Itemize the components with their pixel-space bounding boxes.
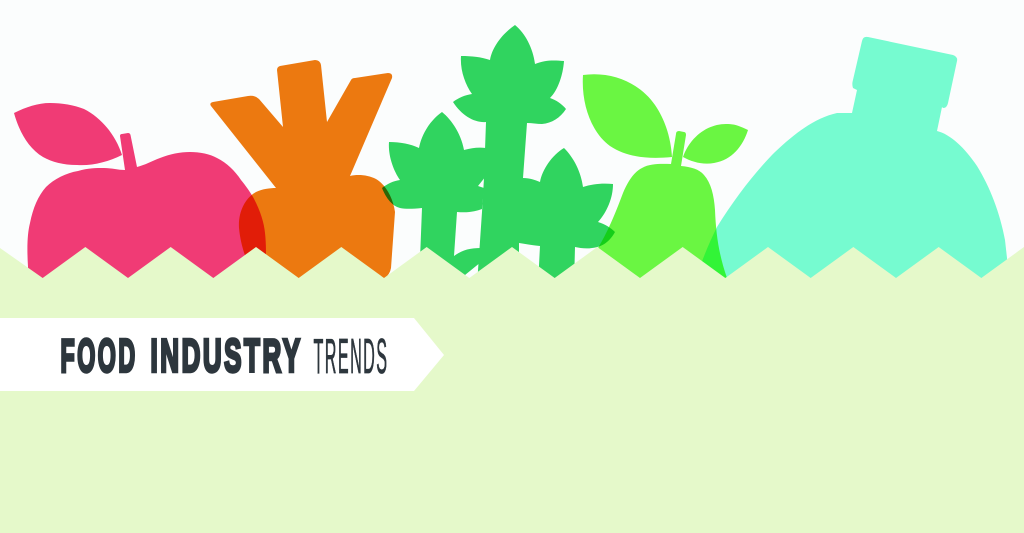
title: trends: TRENDS <box>314 329 388 384</box>
title: food industry: FOOD <box>60 330 138 382</box>
celery left head and stalk <box>382 112 486 285</box>
icon: pear <box>583 74 748 285</box>
celery top head and stalk <box>453 25 615 285</box>
icon: bottle <box>694 37 1010 285</box>
ground panel with zigzag edge <box>0 247 1024 533</box>
title: food industry <box>60 330 303 382</box>
icon: apple <box>14 103 266 285</box>
icon: celery <box>382 25 615 285</box>
title banner <box>0 318 444 391</box>
title: food industry: INDUSTRY <box>150 330 303 381</box>
icon: carrot <box>210 60 395 285</box>
